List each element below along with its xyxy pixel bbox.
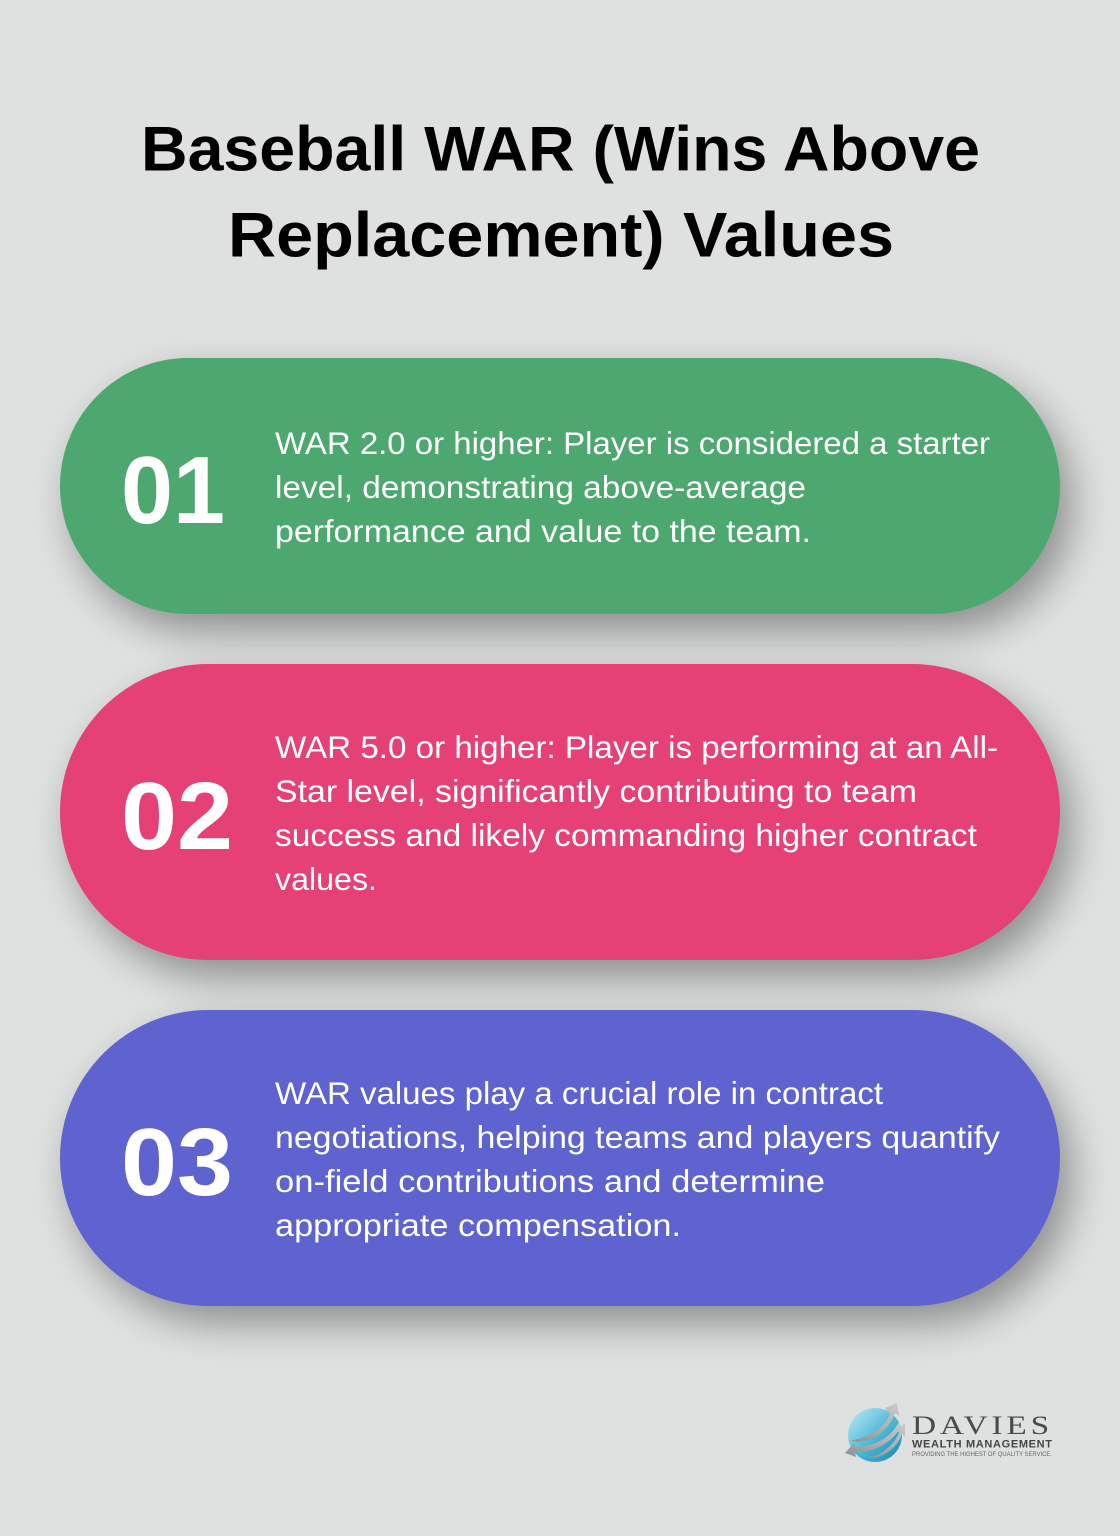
text: step 03 description	[275, 1075, 1000, 1243]
text: step 01 description	[275, 425, 990, 549]
text: step 03 description: appropriate compensation.	[275, 1207, 681, 1243]
title: Baseball WAR (Wins Above	[141, 114, 980, 184]
text: step 02 description: values.	[275, 861, 377, 897]
text: step 03 description: negotiations, helping teams and players quantify	[275, 1119, 1000, 1155]
text: step 02 description	[275, 729, 998, 897]
title	[141, 114, 980, 270]
text: step 03 description: on-field contributions and determine	[275, 1163, 825, 1199]
logo subtitle: WEALTH MANAGEMENT	[912, 1438, 1052, 1450]
number 02: 02	[121, 763, 233, 870]
panel: step 01	[60, 358, 1072, 632]
text: step 02 description: Star level, significantly contributing to team	[275, 773, 917, 809]
text: step 01 description: WAR 2.0 or higher: Player is considered a starter	[275, 425, 990, 461]
number 03: 03	[121, 1109, 233, 1216]
logo: Davies Wealth Management	[845, 1403, 1053, 1462]
text: step 02 description: success and likely commanding higher contract	[275, 817, 977, 853]
logo wordmark: DAVIES	[912, 1411, 1053, 1440]
text: step 01 description: performance and value to the team.	[275, 513, 811, 549]
icon: globe with arrows	[845, 1403, 905, 1462]
title: Replacement) Values	[228, 200, 894, 270]
text: step 01 description: level, demonstrating above-average	[275, 469, 806, 505]
number 01: 01	[121, 437, 225, 544]
logo tagline: PROVIDING THE HIGHEST OF QUALITY SERVICE.	[912, 1451, 1052, 1458]
panel: step 02	[60, 664, 1072, 978]
text: step 02 description: WAR 5.0 or higher: Player is performing at an All-	[275, 729, 998, 765]
text: step 03 description: WAR values play a crucial role in contract	[275, 1075, 883, 1111]
panel: step 03	[60, 1010, 1072, 1324]
